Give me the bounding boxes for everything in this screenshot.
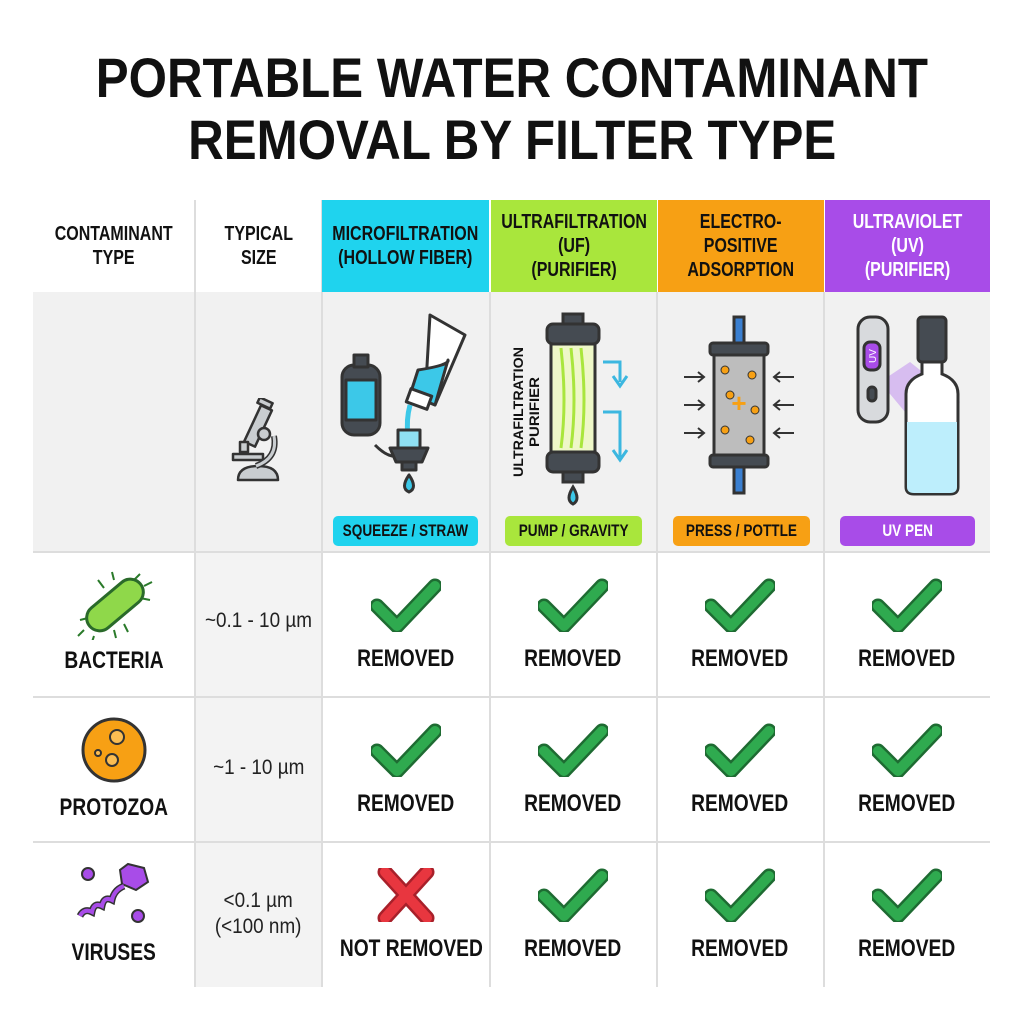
icon: hollow fiber squeeze filter [340, 314, 466, 494]
result: viruses / electropositive [691, 868, 788, 962]
header: ultrafiltration: (PURIFIER) [531, 259, 617, 281]
icon: microscope [232, 398, 280, 482]
header: ultrafiltration: ULTRAFILTRATION [501, 211, 647, 233]
header: ultraviolet: (PURIFIER) [865, 259, 950, 281]
size: viruses: <0.1 µm [224, 889, 293, 912]
result: protozoa / UF: REMOVED [524, 790, 621, 817]
size: protozoa: ~1 - 10 µm [213, 756, 304, 779]
result: bacteria / UV [858, 578, 955, 672]
result: protozoa / microfiltration [357, 724, 454, 817]
size: viruses: (<100 nm) [215, 915, 302, 938]
icon: UV pen and bottle: UV [868, 349, 879, 363]
header: microfiltration: MICROFILTRATION [332, 223, 479, 245]
header: microfiltration [322, 200, 489, 292]
header: ultraviolet: ULTRAVIOLET [853, 211, 962, 233]
result: protozoa / microfiltration: REMOVED [357, 790, 454, 817]
header: ultrafiltration [491, 200, 657, 292]
pill: pump/gravity: PUMP / GRAVITY [519, 521, 628, 540]
result: protozoa / UV [858, 724, 955, 817]
result: viruses / microfiltration (not removed): NOT REMOVED [340, 935, 483, 962]
header: contaminant type: TYPE [93, 247, 135, 269]
result: bacteria / UF [524, 578, 621, 672]
header: ultrafiltration: (UF) [558, 235, 590, 257]
result: bacteria / electropositive: REMOVED [691, 645, 788, 672]
result: bacteria / microfiltration: REMOVED [357, 645, 454, 672]
row: protozoa: PROTOZOA [60, 794, 168, 821]
icon: electropositive cartridge: + [731, 388, 747, 418]
result: bacteria / microfiltration [357, 578, 454, 672]
header: electropositive: ELECTRO- [700, 211, 782, 233]
header: typical size [224, 223, 293, 269]
header: typical size: SIZE [241, 247, 276, 269]
title [96, 46, 928, 171]
row: protozoa [60, 718, 168, 821]
row: bacteria [64, 572, 164, 674]
icon: bacteria [77, 572, 152, 640]
result: viruses / microfiltration (not removed) [340, 868, 483, 962]
result: viruses / UF [524, 868, 621, 962]
icon: ultrafiltration pump [510, 312, 628, 506]
icon: ultrafiltration pump: PURIFIER [526, 377, 542, 447]
result: bacteria / UF: REMOVED [524, 645, 621, 672]
icon: protozoa [82, 718, 146, 782]
header: electropositive: POSITIVE [704, 235, 778, 257]
result: protozoa / electropositive [691, 724, 788, 817]
result: bacteria / electropositive [691, 578, 788, 672]
header: microfiltration: (HOLLOW FIBER) [338, 247, 473, 269]
result: protozoa / UF [524, 724, 621, 817]
title: REMOVAL BY FILTER TYPE [188, 108, 836, 171]
pill: press/pottle: PRESS / POTTLE [686, 521, 797, 540]
result: bacteria / UV: REMOVED [858, 645, 955, 672]
icon: ultrafiltration pump: ULTRAFILTRATION [510, 347, 526, 477]
icon: UV pen and bottle [856, 316, 960, 496]
result: viruses / electropositive: REMOVED [691, 935, 788, 962]
result: viruses / UF: REMOVED [524, 935, 621, 962]
header: electropositive: ADSORPTION [688, 259, 794, 281]
icon: viruses [76, 862, 150, 923]
header: ultraviolet: (UV) [891, 235, 924, 257]
result: viruses / UV: REMOVED [858, 935, 955, 962]
size: bacteria: ~0.1 - 10 µm [205, 609, 312, 632]
header: contaminant type [55, 223, 173, 269]
header: contaminant type: CONTAMINANT [55, 223, 173, 245]
title: PORTABLE WATER CONTAMINANT [96, 46, 928, 109]
header: typical size: TYPICAL [224, 223, 293, 245]
results grid [340, 578, 955, 962]
header: ultraviolet [825, 200, 990, 292]
result: viruses / UV [858, 868, 955, 962]
background: image row [33, 292, 990, 552]
row: bacteria: BACTERIA [64, 647, 164, 674]
size: viruses [215, 889, 302, 938]
pill: UV pen [840, 516, 975, 546]
result: protozoa / UV: REMOVED [858, 790, 955, 817]
result: protozoa / electropositive: REMOVED [691, 790, 788, 817]
row: viruses: VIRUSES [72, 939, 156, 966]
pill: pump/gravity [505, 516, 642, 546]
pill: press/pottle [673, 516, 810, 546]
icon: electropositive cartridge [684, 316, 794, 494]
background: size column [195, 552, 322, 987]
header: electropositive [658, 200, 824, 292]
row: viruses [72, 862, 156, 966]
pill: UV pen: UV PEN [882, 521, 933, 540]
pill: squeeze/straw: SQUEEZE / STRAW [343, 521, 468, 540]
pill: squeeze/straw [333, 516, 478, 546]
